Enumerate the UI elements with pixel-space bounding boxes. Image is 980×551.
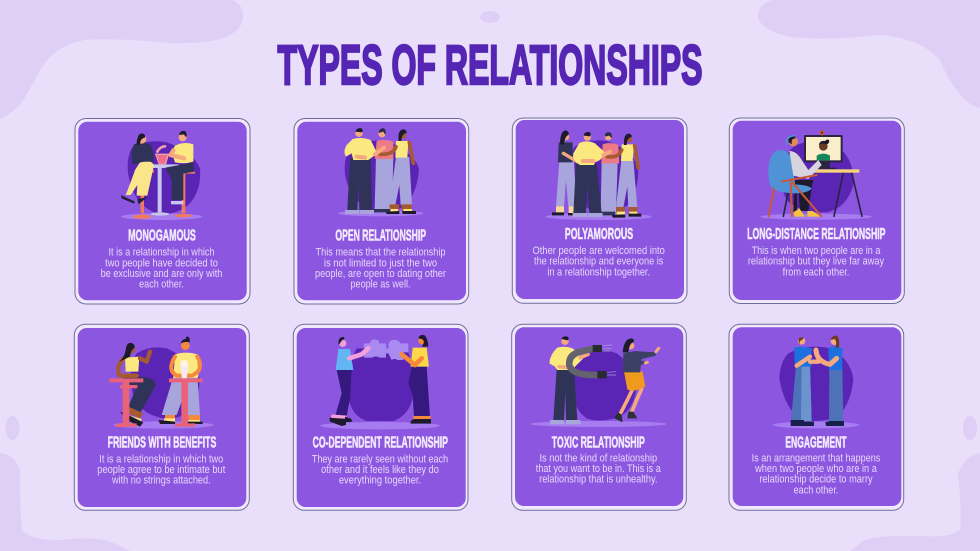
description: This means that the relationship	[316, 247, 446, 259]
description: people agree to be intimate but	[97, 464, 225, 476]
heading: FRIENDS WITH BENEFITS	[108, 434, 216, 451]
description: relationship decide to marry	[759, 474, 873, 486]
description: Is not the kind of relationship	[539, 452, 657, 464]
description: people as well.	[350, 279, 410, 291]
heading: TOXIC RELATIONSHIP	[552, 434, 645, 451]
panel: open relationship	[294, 118, 469, 304]
panel: monogamous	[75, 118, 250, 304]
description: is not limited to just the two	[324, 257, 437, 269]
description: that you want to be in. This is a	[536, 463, 662, 475]
description: the relationship and everyone is	[534, 256, 664, 268]
panel: toxic relationship	[512, 324, 686, 510]
heading: ENGAGEMENT	[785, 434, 847, 451]
illustration: man with a magnet and woman	[530, 336, 667, 427]
description: Is an arrangement that happens	[752, 452, 881, 464]
illustration: two people joining puzzle pieces	[320, 335, 440, 429]
panel: engagement	[729, 324, 904, 510]
description: each other.	[139, 279, 184, 291]
heading: POLYAMOROUS	[565, 226, 633, 243]
illustration: four people standing	[545, 130, 652, 220]
description: people, are open to dating other	[315, 268, 446, 280]
illustration: couple at a table	[121, 131, 202, 220]
description: each other.	[794, 484, 838, 496]
description: relationship that is unhealthy.	[539, 474, 657, 486]
description: Other people are welcomed into	[533, 245, 665, 257]
description: from each other.	[783, 266, 849, 278]
illustration: couple holding hands	[773, 336, 859, 428]
description: It is a relationship in which	[108, 247, 214, 259]
description: in a relationship together.	[547, 266, 650, 278]
description: two people have decided to	[105, 257, 218, 269]
description: with no strings attached.	[111, 475, 211, 487]
panel: polyamorous	[512, 118, 687, 303]
heading: CO-DEPENDENT RELATIONSHIP	[313, 434, 448, 451]
heading: MONOGAMOUS	[128, 228, 196, 245]
description: other and it feels like they do	[321, 464, 439, 476]
description: They are rarely seen without each	[312, 453, 448, 465]
description: This is when two people are in a	[752, 245, 881, 257]
description: everything together.	[339, 475, 421, 487]
panel: co-dependent relationship	[293, 324, 468, 510]
illustration: video call at a desk	[760, 130, 872, 220]
heading: OPEN RELATIONSHIP	[335, 228, 426, 245]
description: when two people who are in a	[754, 463, 878, 475]
description: relationship but they live far away	[748, 256, 885, 268]
panel: friends with benefits	[74, 324, 249, 510]
description: be exclusive and are only with	[101, 268, 222, 280]
illustration: three people standing	[338, 128, 423, 216]
illustration: two friends on stools	[109, 337, 213, 429]
description: It is a relationship in which two	[99, 453, 223, 465]
panel: long-distance relationship	[729, 118, 904, 304]
